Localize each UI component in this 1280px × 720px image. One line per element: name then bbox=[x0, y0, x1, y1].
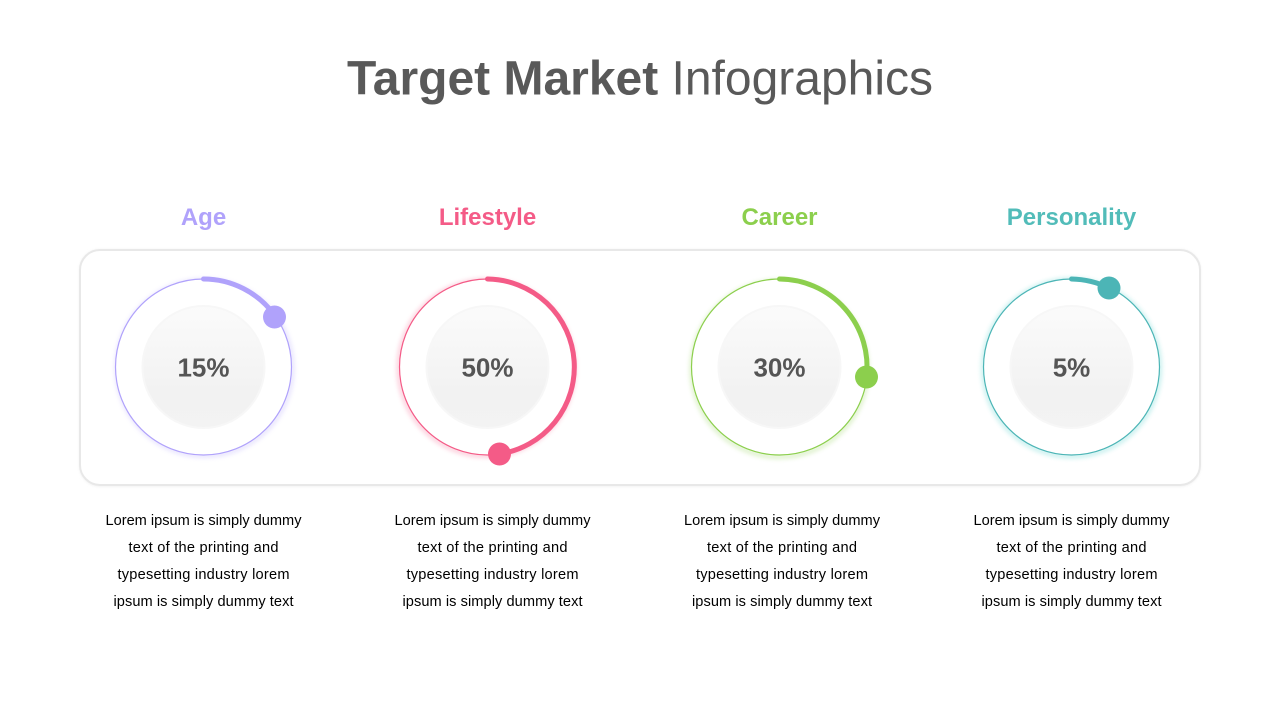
gauge: personality 5% bbox=[983, 276, 1160, 456]
gauge: age 15%: 15% bbox=[177, 352, 230, 382]
text block: personality: Lorem ipsum is simply dummy bbox=[974, 513, 1170, 529]
text block: personality: typesetting industry lorem bbox=[986, 567, 1158, 583]
heading: lifestyle: Lifestyle bbox=[439, 204, 536, 231]
column: personality bbox=[974, 204, 1170, 610]
text block: age: Lorem ipsum is simply dummy bbox=[106, 513, 302, 529]
text block: age bbox=[106, 513, 302, 610]
text block: career bbox=[684, 513, 881, 610]
gauge: career 30%: 30% bbox=[753, 352, 806, 382]
title: Target Market Infographics bbox=[347, 52, 933, 106]
gauge: career 30% bbox=[692, 279, 878, 457]
text block: career: ipsum is simply dummy text bbox=[692, 594, 872, 610]
text block: age: text of the printing and bbox=[128, 540, 278, 556]
text block: personality bbox=[974, 513, 1170, 610]
heading: age: Age bbox=[181, 204, 226, 231]
text block: lifestyle: text of the printing and bbox=[418, 540, 568, 556]
gauge: age 15% bbox=[116, 279, 292, 456]
text block: age: typesetting industry lorem bbox=[118, 567, 290, 583]
text block: personality: text of the printing and bbox=[996, 540, 1146, 556]
text block: lifestyle: Lorem ipsum is simply dummy bbox=[394, 513, 591, 529]
text block: lifestyle: ipsum is simply dummy text bbox=[402, 594, 582, 610]
column: age bbox=[106, 204, 302, 610]
column: career bbox=[684, 204, 881, 610]
gauge: lifestyle 50%: 50% bbox=[461, 352, 514, 382]
column: lifestyle bbox=[394, 204, 591, 610]
heading: personality: Personality bbox=[1007, 204, 1137, 231]
gauge: lifestyle 50% bbox=[398, 279, 576, 466]
text block: lifestyle bbox=[394, 513, 591, 610]
text block: age: ipsum is simply dummy text bbox=[114, 594, 294, 610]
text block: career: Lorem ipsum is simply dummy bbox=[684, 513, 881, 529]
text block: career: typesetting industry lorem bbox=[696, 567, 868, 583]
heading: career: Career bbox=[741, 204, 818, 231]
text block: lifestyle: typesetting industry lorem bbox=[406, 567, 578, 583]
panel: rounded container bbox=[80, 250, 1200, 486]
text block: personality: ipsum is simply dummy text bbox=[982, 594, 1162, 610]
gauge: personality 5%: 5% bbox=[1053, 352, 1090, 382]
text block: career: text of the printing and bbox=[707, 540, 857, 556]
